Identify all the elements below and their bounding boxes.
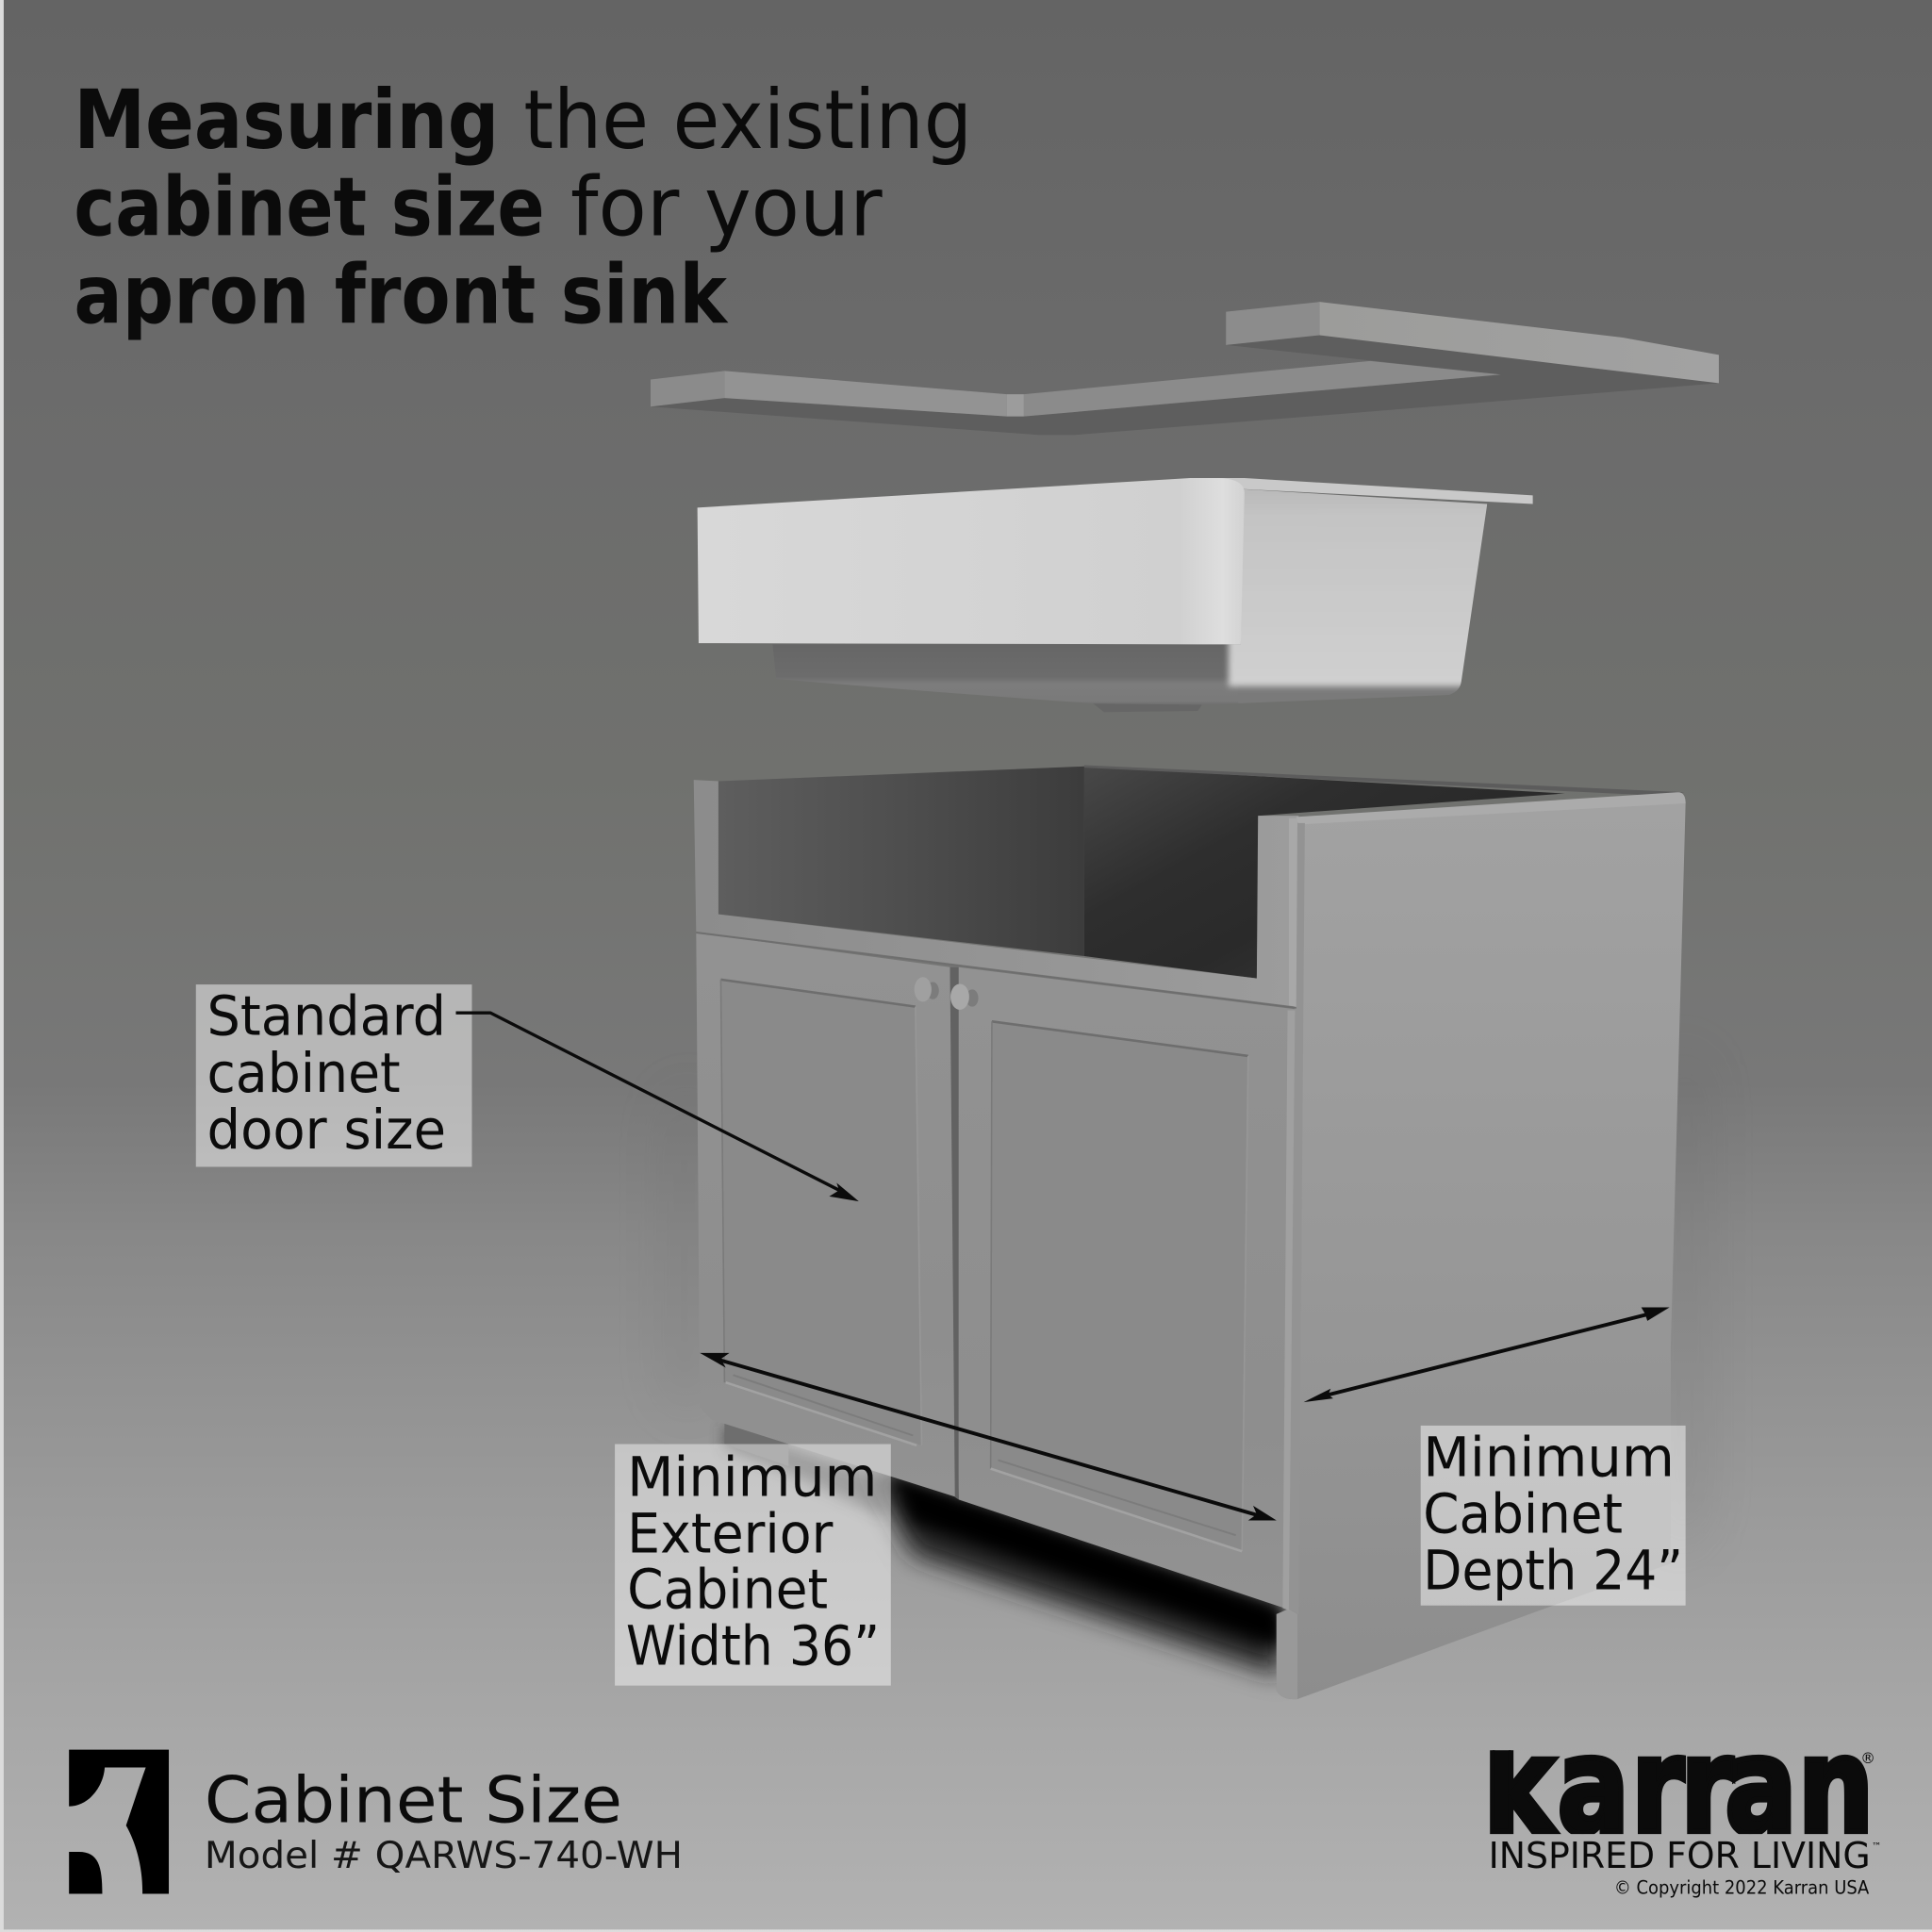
label box: door size: Standard — [207, 985, 446, 1049]
brand logo — [1490, 1750, 1880, 1897]
countertop — [651, 302, 1719, 435]
label box: door size: cabinet — [207, 1042, 401, 1105]
title: the existing — [523, 74, 972, 168]
brand logo: © Copyright 2022 Karran USA — [1614, 1876, 1870, 1898]
sink drain — [1092, 702, 1204, 712]
label box: cabinet depth: Minimum — [1423, 1426, 1675, 1489]
side panel — [1277, 799, 1686, 1699]
label box: cabinet depth: Depth 24” — [1423, 1540, 1683, 1603]
brand logo: karran — [1483, 1709, 1874, 1864]
brand logo: ™ — [1872, 1841, 1881, 1852]
right door — [959, 967, 1295, 1610]
wall shadows — [671, 1084, 698, 1417]
icon: K mark — [69, 1750, 169, 1893]
label box: door size — [196, 984, 471, 1167]
footer caption: Model # QARWS-740-WH — [205, 1835, 683, 1877]
title: cabinet size — [74, 161, 545, 256]
arrow: door size — [456, 1013, 859, 1201]
knob right — [950, 983, 979, 1010]
sink — [698, 474, 1533, 712]
sink bowl — [773, 489, 1488, 705]
label box: cabinet width: Width 36” — [626, 1614, 880, 1677]
label box: cabinet depth: Cabinet — [1423, 1483, 1623, 1546]
title: for your — [570, 161, 883, 256]
label box: door size: door size — [207, 1098, 446, 1162]
side panel top edge — [1296, 792, 1686, 824]
cabinet — [671, 765, 1700, 1699]
side corner shade — [1289, 823, 1305, 1614]
door gap — [950, 967, 959, 1499]
knob left — [915, 977, 939, 1001]
cabinet interior left wall — [718, 767, 1084, 956]
label box: cabinet width: Exterior — [627, 1503, 834, 1566]
frame lower edge — [696, 933, 1296, 1008]
left door — [696, 933, 956, 1497]
frame highlight strip — [1289, 818, 1297, 1007]
foot strip — [1277, 1610, 1297, 1699]
floor shadow — [724, 1426, 887, 1518]
brand logo: ® — [1860, 1749, 1875, 1767]
footer caption — [205, 1764, 683, 1877]
label box: cabinet depth — [1421, 1426, 1686, 1606]
title: Measuring — [74, 74, 499, 168]
front frame — [694, 780, 1298, 1007]
footer caption: Cabinet Size — [205, 1764, 622, 1839]
label box: cabinet width: Minimum — [627, 1445, 877, 1509]
cabinet interior right wall — [1084, 767, 1565, 979]
label box: cabinet width: Cabinet — [627, 1558, 828, 1621]
title: apron front sink — [74, 248, 728, 342]
brand logo: INSPIRED FOR LIVING — [1489, 1835, 1871, 1876]
cabinet back rim — [1084, 765, 1684, 796]
sink front — [698, 478, 1245, 644]
title — [74, 74, 972, 342]
foot — [724, 1417, 788, 1466]
arrow: cabinet width — [700, 1353, 1277, 1521]
sink lip — [1190, 478, 1533, 504]
label box: cabinet width — [615, 1445, 891, 1686]
arrow: cabinet depth — [1304, 1307, 1670, 1402]
